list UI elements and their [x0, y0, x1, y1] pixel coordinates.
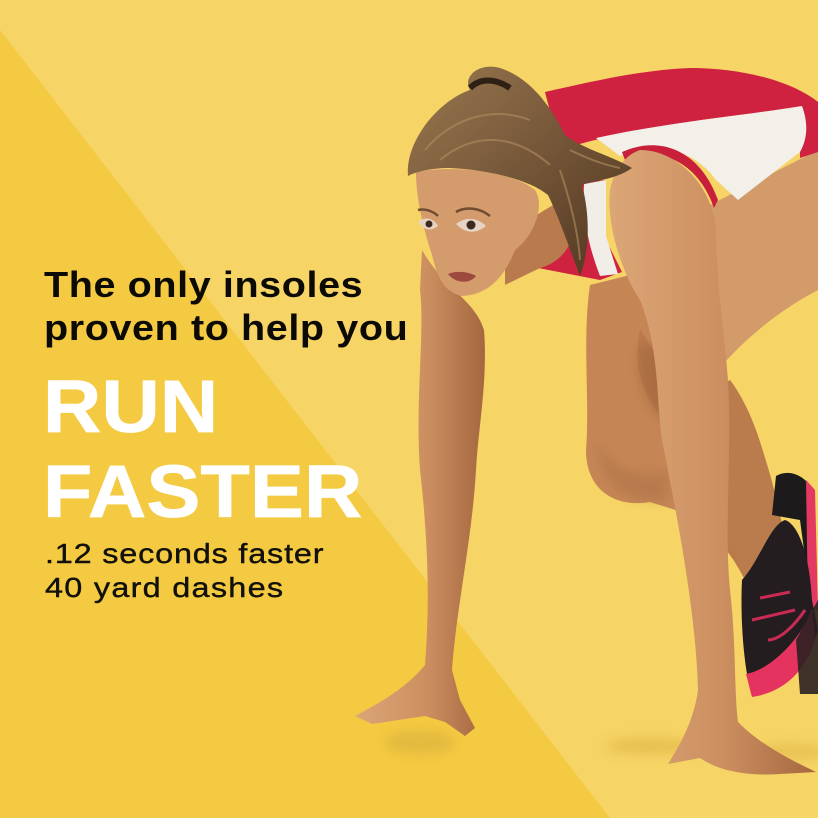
face [416, 169, 539, 296]
singlet white panel [596, 106, 806, 200]
text: statistic: .12 seconds faster [45, 538, 324, 569]
far arm [355, 250, 485, 736]
front shoe [741, 520, 818, 697]
hand shadows [384, 730, 818, 758]
back thigh and far leg [586, 150, 818, 580]
heading: run faster: FASTER [43, 450, 363, 533]
eyes and lips [418, 209, 490, 282]
heading: the only insoles: proven to help you [44, 307, 408, 348]
heading: run faster: RUN [43, 365, 218, 448]
back shoe [772, 473, 814, 610]
text: statistic [45, 538, 324, 604]
near arm and shoulder [609, 150, 816, 774]
heading: the only insoles: The only insoles [44, 264, 363, 305]
heading: the only insoles [44, 264, 408, 348]
text: statistic: 40 yard dashes [45, 572, 284, 603]
hair [408, 67, 632, 276]
singlet red [545, 68, 818, 158]
singlet red trim and front [622, 145, 718, 208]
neck [505, 190, 582, 285]
heading: run faster [43, 365, 363, 533]
background triangle [0, 30, 610, 818]
